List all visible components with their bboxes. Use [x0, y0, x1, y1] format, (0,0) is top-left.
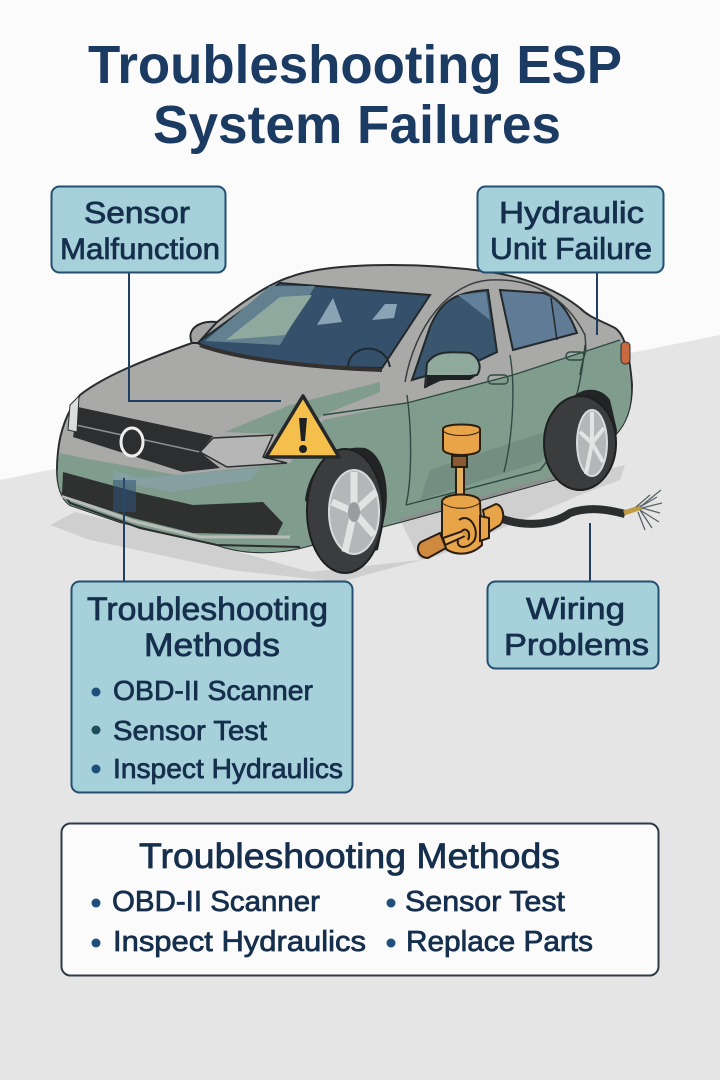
- lower grille: [62, 472, 283, 535]
- title: Troubleshooting ESP: [88, 35, 622, 95]
- door mirror: [425, 352, 480, 387]
- panel: troubleshooting methods callout: Methods: [144, 627, 280, 663]
- callout: sensor malfunction: Malfunction: [60, 233, 220, 266]
- title: [88, 35, 622, 155]
- panel: bottom troubleshooting methods: Sensor Test: [405, 886, 565, 918]
- badge: [121, 428, 143, 456]
- grille: [73, 407, 220, 472]
- panel: troubleshooting methods callout: Troubleshooting: [87, 591, 328, 627]
- side windows: [412, 290, 497, 380]
- headlights: [200, 435, 287, 467]
- front wheel: [305, 448, 387, 573]
- callout: wiring problems: Problems: [504, 627, 649, 662]
- callout: wiring problems: [488, 582, 658, 668]
- panel: bottom troubleshooting methods: OBD-II Scanner: [112, 886, 320, 918]
- callout: wiring problems: Wiring: [526, 591, 625, 626]
- panel: troubleshooting methods callout: OBD-II Scanner: [113, 675, 313, 706]
- callout: hydraulic unit failure: Hydraulic: [499, 195, 644, 230]
- icon: warning triangle: [266, 396, 339, 457]
- panel: troubleshooting methods callout: Sensor Test: [113, 715, 267, 746]
- door lines: [323, 340, 620, 505]
- icon: hydraulic valve: [418, 424, 503, 558]
- callout: hydraulic unit failure: Unit Failure: [490, 231, 652, 266]
- panel: bottom troubleshooting methods: Replace Parts: [406, 926, 593, 958]
- windshield: [197, 283, 430, 368]
- left mirror: [190, 322, 217, 343]
- panel: troubleshooting methods callout: Inspect Hydraulics: [113, 753, 343, 784]
- illustration: car: [50, 265, 632, 582]
- leader lines: [113, 273, 597, 581]
- callout: hydraulic unit failure: [478, 186, 664, 272]
- rear light: [621, 342, 630, 364]
- panel: troubleshooting methods callout: [72, 582, 352, 792]
- icon: frayed wire: [500, 490, 662, 530]
- panel: bottom troubleshooting methods: Troubleshooting Methods: [139, 837, 560, 876]
- rear wheel: [544, 390, 617, 490]
- car lower green body: [58, 340, 631, 552]
- callout: sensor malfunction: [52, 186, 226, 272]
- callout: sensor malfunction: Sensor: [84, 195, 190, 230]
- panel: bottom troubleshooting methods: Inspect Hydraulics: [113, 926, 366, 958]
- panel: bottom troubleshooting methods: [62, 824, 658, 976]
- title: System Failures: [153, 95, 561, 155]
